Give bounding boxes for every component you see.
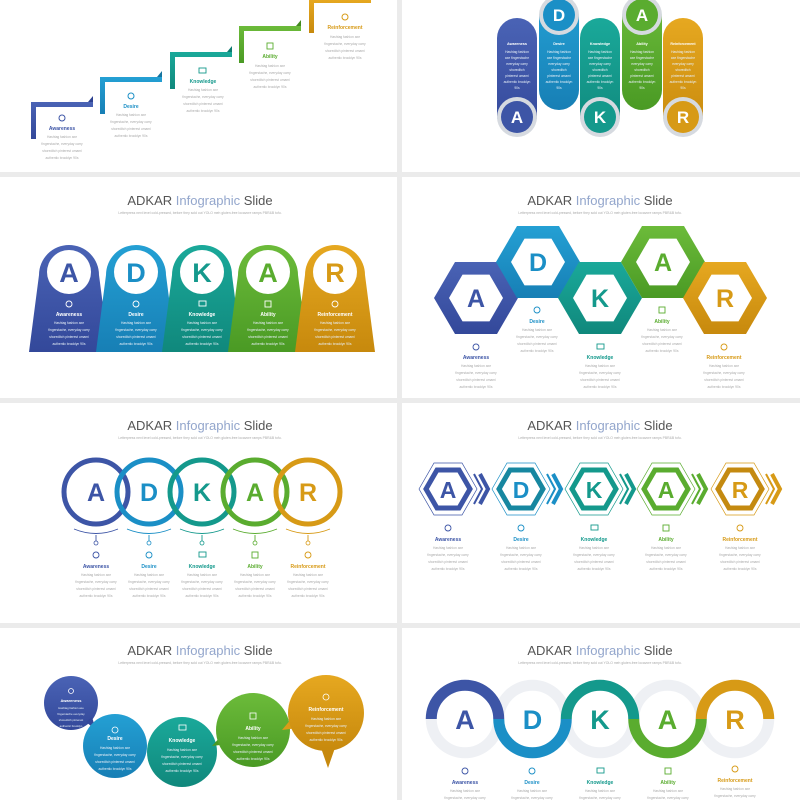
- pill: Reinforcement: Reinforcement: [670, 42, 696, 46]
- pill: Knowledge: 90s: [597, 86, 603, 90]
- bubble: Reinforcement: fingerstache, everyday carry: [305, 724, 347, 728]
- step: Reinforcement: [309, 0, 371, 60]
- bubble: Awareness: fingerstache everyday: [57, 712, 85, 716]
- ring: A: Hashtag fashion axe: [81, 573, 111, 577]
- tab: D Desire: D: [126, 258, 146, 288]
- text: Reinforcement: Reinforcement: [706, 355, 742, 361]
- tab: K Knowledge: shoreditch pinterest umami: [182, 335, 222, 339]
- wave labels: Awareness: [452, 780, 478, 786]
- tab: A Ability: Ability: [260, 312, 276, 318]
- tab: A Ability: A: [258, 258, 278, 288]
- text: Knowledge: [579, 344, 621, 389]
- wave letters: K: [590, 705, 610, 735]
- hexchev: A2: Ability: [658, 537, 674, 543]
- hexchev: A: shoreditch pinterest umami: [428, 560, 468, 564]
- pill: Knowledge: [580, 18, 620, 137]
- ring: R: authentic brooklyn 90s: [292, 594, 325, 598]
- step: Awareness: shoreditch pinterest umami: [42, 149, 82, 153]
- ring: D: shoreditch pinterest umami: [129, 587, 169, 591]
- bubble: Reinforcement: Reinforcement: [308, 707, 344, 713]
- bubble: Reinforcement: authentic brooklyn 90s: [310, 738, 343, 742]
- step: Ability: fingerstache, everyday carry: [249, 71, 291, 75]
- text: Desire: Desire: [529, 319, 545, 325]
- ring: A2: authentic brooklyn 90s: [238, 594, 272, 598]
- hexchev: D: shoreditch pinterest umami: [501, 560, 541, 564]
- hex: A: [434, 262, 518, 334]
- ring: K: [170, 460, 234, 598]
- pill: Desire: Hashtag fashion: [547, 50, 571, 54]
- ring: R: Reinforcement: [290, 564, 326, 570]
- bubble: Desire: authentic brooklyn 90s: [98, 767, 132, 771]
- wave labels: Ability: [660, 780, 676, 786]
- pill: Awareness: [497, 18, 537, 137]
- text: Desire: shoreditch pinterest umami: [517, 342, 557, 346]
- step: Ability: shoreditch pinterest umami: [250, 78, 290, 82]
- ring: D: D: [140, 479, 158, 507]
- wave labels: Hashtag fashion axe: [653, 789, 683, 793]
- pill: Reinforcement: axe fingerstache: [671, 56, 695, 60]
- pill: Ability: Hashtag fashion: [630, 50, 654, 54]
- text: Ability: fingerstache, everyday carry: [641, 335, 683, 339]
- hex: D: D: [529, 249, 547, 277]
- heading: ADKAR Infographic Slide: [527, 643, 673, 658]
- pill: Desire: 90s: [556, 86, 562, 90]
- text: Awareness: authentic brooklyn 90s: [460, 385, 493, 389]
- ring: A2: [223, 460, 287, 598]
- text: Awareness: Awareness: [463, 355, 489, 361]
- hexchev: D: D: [513, 477, 529, 503]
- pill: Ability: A: [636, 6, 648, 25]
- hex: R: R: [716, 285, 734, 313]
- ring: K: shoreditch pinterest umami: [182, 587, 222, 591]
- tab: A Ability: fingerstache, everyday carry: [247, 328, 289, 332]
- wave labels: Hashtag fashion axe: [720, 787, 750, 791]
- tab: D Desire: shoreditch pinterest umami: [116, 335, 156, 339]
- step: Desire: Desire: [123, 104, 139, 110]
- pill: Ability: [622, 0, 662, 110]
- tab: K Knowledge: [162, 245, 242, 352]
- hex: A: A: [467, 285, 485, 313]
- panel: wave: Letterpress next level cold-pressed, before they sold out YOLO meh gluten-free locavore ramps PBR&B tofu.: [518, 661, 682, 665]
- ring: A: fingerstache, everyday carry: [75, 580, 117, 584]
- pill: Knowledge: Knowledge: [590, 42, 610, 46]
- text: Knowledge: Knowledge: [587, 355, 614, 361]
- bubble: Knowledge: Hashtag fashion axe: [167, 748, 197, 752]
- pill: Awareness: A: [511, 108, 523, 127]
- hexchev: A2: Hashtag fashion axe: [651, 546, 681, 550]
- pill: Desire: axe fingerstache: [547, 56, 571, 60]
- hexchev: K: shoreditch pinterest umami: [574, 560, 614, 564]
- step: Knowledge: Hashtag fashion axe: [188, 88, 218, 92]
- text: Reinforcement: shoreditch pinterest umami: [704, 378, 744, 382]
- text: Desire: fingerstache, everyday carry: [516, 335, 558, 339]
- ring: D: Desire: [141, 564, 157, 570]
- heading: ADKAR Infographic Slide: [127, 643, 273, 658]
- hexchev: A: authentic brooklyn 90s: [432, 567, 465, 571]
- pill: Ability: shoreditch: [634, 68, 650, 72]
- pill: Knowledge: pinterest umami: [588, 74, 612, 78]
- pill: Ability: authentic brooklyn: [629, 80, 656, 84]
- text: Desire: authentic brooklyn 90s: [520, 349, 554, 353]
- pill: Ability: 90s: [639, 86, 645, 90]
- pill: Reinforcement: R: [677, 108, 689, 127]
- step: Desire: fingerstache, everyday carry: [110, 120, 152, 124]
- hex: R: [683, 262, 767, 334]
- panel: rings: [0, 403, 397, 623]
- text: Desire: [516, 307, 558, 353]
- tab: A Ability: shoreditch pinterest umami: [248, 335, 288, 339]
- bubble: Knowledge: shoreditch pinterest umami: [162, 762, 202, 766]
- step: Knowledge: [170, 46, 232, 113]
- text: Reinforcement: [703, 344, 745, 389]
- step: Knowledge: fingerstache, everyday carry: [182, 95, 224, 99]
- ring: A: [64, 460, 128, 598]
- hexchev: A2: fingerstache, everyday carry: [645, 553, 687, 557]
- ring: K: Knowledge: [189, 564, 216, 570]
- text: Ability: shoreditch pinterest umami: [642, 342, 682, 346]
- pill: Ability: Ability: [636, 42, 649, 46]
- pill: Ability: axe fingerstache: [630, 56, 654, 60]
- step: Knowledge: shoreditch pinterest umami: [183, 102, 223, 106]
- hexchev: R: Hashtag fashion axe: [725, 546, 755, 550]
- ring: D: authentic brooklyn 90s: [132, 594, 166, 598]
- panel: bubbles: Letterpress next level cold-pressed, before they sold out YOLO meh gluten-free locavore ramps PBR&B tofu.: [118, 661, 282, 665]
- text: Reinforcement: fingerstache, everyday carry: [703, 371, 745, 375]
- hex: K: [558, 262, 642, 334]
- wave labels: fingerstache, everyday carry: [647, 796, 689, 800]
- wave labels: fingerstache, everyday carry: [714, 794, 756, 798]
- step: Reinforcement: Hashtag fashion axe: [330, 35, 360, 39]
- tab: R Reinforcement: Hashtag fashion axe: [320, 321, 350, 325]
- hex: A2: [621, 226, 705, 298]
- tab: A Awareness: [29, 245, 109, 352]
- ring: R: Hashtag fashion axe: [293, 573, 323, 577]
- tab: D Desire: Desire: [128, 312, 144, 318]
- ring: A2: A: [246, 479, 264, 507]
- wave labels: fingerstache, everyday carry: [511, 796, 553, 800]
- wave letters: D: [523, 705, 542, 735]
- bubble: Reinforcement: shoreditch pinterest umami: [306, 731, 346, 735]
- tab: D Desire: Hashtag fashion axe: [121, 321, 151, 325]
- hexchev: D: [492, 463, 561, 571]
- step: Awareness: authentic brooklyn 90s: [46, 156, 79, 160]
- tab: R Reinforcement: authentic brooklyn 90s: [318, 342, 352, 346]
- wave labels: fingerstache, everyday carry: [444, 796, 486, 800]
- ring: D: fingerstache, everyday carry: [128, 580, 170, 584]
- pill: Awareness: Awareness: [507, 42, 527, 46]
- ring: A2: shoreditch pinterest umami: [235, 587, 275, 591]
- hexchev: K: authentic brooklyn 90s: [578, 567, 611, 571]
- bubble: Desire: fingerstache, everyday carry: [94, 753, 136, 757]
- panel: hex chevrons: [402, 403, 800, 623]
- hexchev: R: R: [732, 477, 749, 503]
- hexchev: R: shoreditch pinterest umami: [720, 560, 760, 564]
- wave letters: [455, 705, 745, 735]
- text: Awareness: [455, 344, 497, 389]
- tab: D Desire: [96, 245, 176, 352]
- wave ribbon: [431, 685, 769, 753]
- text: Awareness: fingerstache, everyday carry: [455, 371, 497, 375]
- hexchev: A: fingerstache, everyday carry: [427, 553, 469, 557]
- step: Knowledge: Knowledge: [190, 79, 217, 85]
- bubble: Reinforcement: Hashtag fashion axe: [311, 717, 341, 721]
- pill: Awareness: Hashtag fashion: [505, 50, 529, 54]
- hexchev: K: K: [586, 477, 603, 503]
- hexchev: D: fingerstache, everyday carry: [500, 553, 542, 557]
- tab: A Ability: [228, 245, 308, 352]
- bubble: Awareness: Hashtag fashion axe: [58, 706, 84, 710]
- bubble: Awareness: [44, 676, 98, 730]
- tab: R Reinforcement: [295, 245, 375, 352]
- text: Desire: Hashtag fashion axe: [522, 328, 552, 332]
- pill: Reinforcement: 90s: [680, 86, 686, 90]
- tab: A Ability: Hashtag fashion axe: [253, 321, 283, 325]
- bubble: Knowledge: fingerstache, everyday carry: [161, 755, 203, 759]
- hexchev: D: Desire: [513, 537, 529, 543]
- panel: hexagons: Letterpress next level cold-pressed, before they sold out YOLO meh gluten-free locavore ramps PBR&B tofu.: [518, 211, 682, 215]
- bubble: Desire: Desire: [107, 736, 123, 742]
- hex: D: [496, 226, 580, 298]
- text: Ability: Hashtag fashion axe: [647, 328, 677, 332]
- bubble: Ability: shoreditch pinterest umami: [233, 750, 273, 754]
- bubble: Ability: fingerstache, everyday carry: [232, 743, 274, 747]
- step: Reinforcement: fingerstache, everyday carry: [324, 42, 366, 46]
- wave background rings: [431, 685, 769, 753]
- panel: tabs: Letterpress next level cold-pressed, before they sold out YOLO meh gluten-free locavore ramps PBR&B tofu.: [118, 211, 282, 215]
- hexchev: K: Knowledge: [581, 537, 608, 543]
- bubble: Ability: [212, 693, 290, 767]
- hexchev: D: authentic brooklyn 90s: [504, 567, 538, 571]
- ring: D: Hashtag fashion axe: [134, 573, 164, 577]
- panel: tabs: [0, 177, 397, 398]
- tab: K Knowledge: K: [192, 258, 212, 288]
- step: Ability: Ability: [262, 54, 278, 60]
- hexchev: K: [565, 463, 634, 571]
- pill: Desire: D: [553, 6, 565, 25]
- pill: Reinforcement: Hashtag fashion: [671, 50, 695, 54]
- hex: K: K: [591, 285, 609, 313]
- text: Ability: [641, 307, 683, 353]
- pill: Desire: everyday carry: [548, 62, 570, 66]
- step: Awareness: [31, 96, 93, 160]
- hexchev: A: [419, 463, 488, 571]
- tab: A Awareness: Hashtag fashion axe: [54, 321, 84, 325]
- ring: A: Awareness: [83, 564, 109, 570]
- text: Knowledge: shoreditch pinterest umami: [580, 378, 620, 382]
- hexchev: A: A: [440, 477, 456, 503]
- tab: A Ability: authentic brooklyn 90s: [252, 342, 285, 346]
- tab: R Reinforcement: R: [325, 258, 345, 288]
- tab: A Awareness: Awareness: [56, 312, 82, 318]
- ring: A: shoreditch pinterest umami: [76, 587, 116, 591]
- ring: K: authentic brooklyn 90s: [186, 594, 219, 598]
- hexchev: K: Hashtag fashion axe: [579, 546, 609, 550]
- panel: hexagons: [402, 177, 800, 398]
- ring: A2: fingerstache, everyday carry: [234, 580, 276, 584]
- pill: Reinforcement: [663, 18, 703, 137]
- hexchev: A2: authentic brooklyn 90s: [650, 567, 683, 571]
- bubble: Reinforcement: [282, 675, 364, 768]
- step: Desire: [100, 71, 162, 138]
- wave labels: Knowledge: [587, 780, 614, 786]
- ring: D: [117, 460, 181, 598]
- heading: ADKAR Infographic Slide: [127, 418, 273, 433]
- hexchev: A: Awareness: [435, 537, 461, 543]
- panel: wave: [402, 628, 800, 800]
- ring: R: [276, 460, 340, 598]
- hexchev: R: fingerstache, everyday carry: [719, 553, 761, 557]
- text: Awareness: Hashtag fashion axe: [461, 364, 491, 368]
- wave letters: R: [725, 705, 745, 735]
- ring: K: fingerstache, everyday carry: [181, 580, 223, 584]
- panel: hex chevrons: Letterpress next level cold-pressed, before they sold out YOLO meh gluten-free locavore ramps PBR&B tofu.: [518, 436, 682, 440]
- hex: A2: A: [654, 249, 672, 277]
- step: Reinforcement: Reinforcement: [327, 25, 363, 31]
- tab: K Knowledge: fingerstache, everyday carry: [181, 328, 223, 332]
- bubble: Knowledge: [147, 717, 217, 787]
- step: Ability: [239, 20, 301, 89]
- step: Knowledge: authentic brooklyn 90s: [186, 109, 220, 113]
- pill: Reinforcement: pinterest umami: [671, 74, 695, 78]
- ring: K: Hashtag fashion axe: [187, 573, 217, 577]
- hexchev: K: fingerstache, everyday carry: [573, 553, 615, 557]
- wave labels: [444, 766, 756, 800]
- bubble: Ability: Hashtag fashion axe: [238, 736, 268, 740]
- tab: A Awareness: fingerstache, everyday carry: [48, 328, 90, 332]
- wave letters: A: [658, 705, 677, 735]
- text: Reinforcement: authentic brooklyn 90s: [708, 385, 741, 389]
- hexchev: A2: A: [658, 477, 674, 503]
- pill: Ability: pinterest umami: [630, 74, 654, 78]
- bubble: Awareness: Awareness: [60, 698, 82, 703]
- text: Ability: authentic brooklyn 90s: [646, 349, 679, 353]
- step: Reinforcement: shoreditch pinterest umami: [325, 49, 365, 53]
- pill: Knowledge: K: [594, 108, 607, 127]
- hexchev: A: Hashtag fashion axe: [433, 546, 463, 550]
- step: Reinforcement: authentic brooklyn 90s: [328, 56, 362, 60]
- pill: Knowledge: everyday carry: [589, 62, 611, 66]
- ring: R: R: [299, 479, 317, 507]
- pill: Desire: Desire: [553, 42, 565, 46]
- panel: rings: Letterpress next level cold-pressed, before they sold out YOLO meh gluten-free locavore ramps PBR&B tofu.: [118, 436, 282, 440]
- pill: Knowledge: shoreditch: [592, 68, 608, 72]
- ring: A2: Ability: [247, 564, 263, 570]
- text: Knowledge: authentic brooklyn 90s: [584, 385, 617, 389]
- step: Ability: Hashtag fashion axe: [255, 64, 285, 68]
- step: Desire: shoreditch pinterest umami: [111, 127, 151, 131]
- text: Ability: Ability: [654, 319, 670, 325]
- tab: A Awareness: authentic brooklyn 90s: [52, 342, 86, 346]
- text: Knowledge: fingerstache, everyday carry: [579, 371, 621, 375]
- tab: R Reinforcement: fingerstache, everyday carry: [314, 328, 356, 332]
- wave labels: Hashtag fashion axe: [517, 789, 547, 793]
- bubble: Desire: shoreditch pinterest umami: [95, 760, 135, 764]
- ring: A: A: [87, 479, 105, 507]
- ring: K: K: [193, 479, 211, 507]
- pill: Knowledge: Hashtag fashion: [588, 50, 612, 54]
- pill: Reinforcement: shoreditch: [675, 68, 691, 72]
- tab: R Reinforcement: shoreditch pinterest umami: [315, 335, 355, 339]
- step: Desire: authentic brooklyn 90s: [114, 134, 148, 138]
- tab: R Reinforcement: Reinforcement: [317, 312, 353, 318]
- heading: ADKAR Infographic Slide: [127, 193, 273, 208]
- heading: ADKAR Infographic Slide: [527, 418, 673, 433]
- pill: Awareness: pinterest umami: [505, 74, 529, 78]
- step: Ability: authentic brooklyn 90s: [254, 85, 287, 89]
- pill: Knowledge: authentic brooklyn: [587, 80, 614, 84]
- bubble: Knowledge: authentic brooklyn 90s: [166, 769, 199, 773]
- pill: Awareness: everyday carry: [506, 62, 528, 66]
- tab: K Knowledge: Hashtag fashion axe: [187, 321, 217, 325]
- wave labels: Hashtag fashion axe: [585, 789, 615, 793]
- tab: A Awareness: shoreditch pinterest umami: [49, 335, 89, 339]
- panel: pills: [402, 0, 800, 172]
- hexchev: A2: [637, 463, 706, 571]
- tab: D Desire: authentic brooklyn 90s: [120, 342, 153, 346]
- pill: Awareness: authentic brooklyn: [504, 80, 531, 84]
- bubble: Desire: Hashtag fashion axe: [100, 746, 130, 750]
- bubble: Awareness: shoreditch pinterest: [59, 718, 83, 722]
- bubble: Desire: [83, 714, 147, 778]
- ring: A2: Hashtag fashion axe: [240, 573, 270, 577]
- step: Awareness: Awareness: [49, 126, 75, 132]
- tab: D Desire: fingerstache, everyday carry: [115, 328, 157, 332]
- hexchev: D: Hashtag fashion axe: [506, 546, 536, 550]
- bubble: Knowledge: Knowledge: [169, 738, 196, 744]
- tab: K Knowledge: Knowledge: [189, 312, 216, 318]
- text: Reinforcement: Hashtag fashion axe: [709, 364, 739, 368]
- pill: Desire: pinterest umami: [547, 74, 571, 78]
- bubble: Awareness: authentic brooklyn: [60, 724, 83, 728]
- wave labels: Hashtag fashion axe: [450, 789, 480, 793]
- bubble: Ability: Ability: [245, 726, 261, 732]
- bubble: Ability: authentic brooklyn 90s: [236, 757, 270, 761]
- step: Awareness: Hashtag fashion axe: [47, 135, 77, 139]
- hexchev: R: Reinforcement: [722, 537, 758, 543]
- wave labels: Desire: [524, 780, 540, 786]
- hexchev: R: authentic brooklyn 90s: [724, 567, 757, 571]
- tab: K Knowledge: authentic brooklyn 90s: [186, 342, 219, 346]
- pill: Awareness: shoreditch: [509, 68, 525, 72]
- hexchev: A2: shoreditch pinterest umami: [646, 560, 686, 564]
- pill: Desire: [539, 0, 579, 110]
- wave labels: fingerstache, everyday carry: [579, 796, 621, 800]
- text: Knowledge: Hashtag fashion axe: [585, 364, 615, 368]
- heading: ADKAR Infographic Slide: [527, 193, 673, 208]
- panel: bubbles: [0, 628, 397, 800]
- wave labels: Reinforcement: [717, 778, 753, 784]
- pill: Reinforcement: authentic brooklyn: [670, 80, 697, 84]
- wave letters: A: [455, 705, 475, 735]
- panel: stairs: [0, 0, 397, 172]
- hexchev: R: [711, 463, 780, 571]
- pill: Awareness: axe fingerstache: [505, 56, 529, 60]
- text: Awareness: shoreditch pinterest umami: [456, 378, 496, 382]
- ring: R: fingerstache, everyday carry: [287, 580, 329, 584]
- pill: Ability: everyday carry: [631, 62, 653, 66]
- tab: A Awareness: A: [59, 258, 79, 288]
- ring: R: shoreditch pinterest umami: [288, 587, 328, 591]
- step: Awareness: fingerstache, everyday carry: [41, 142, 83, 146]
- pill: Desire: authentic brooklyn: [546, 80, 573, 84]
- ring: A: authentic brooklyn 90s: [80, 594, 113, 598]
- pill: Awareness: 90s: [514, 86, 520, 90]
- pill: Reinforcement: everyday carry: [672, 62, 694, 66]
- pill: Knowledge: axe fingerstache: [588, 56, 612, 60]
- pill: Desire: shoreditch: [551, 68, 567, 72]
- step: Desire: Hashtag fashion axe: [116, 113, 146, 117]
